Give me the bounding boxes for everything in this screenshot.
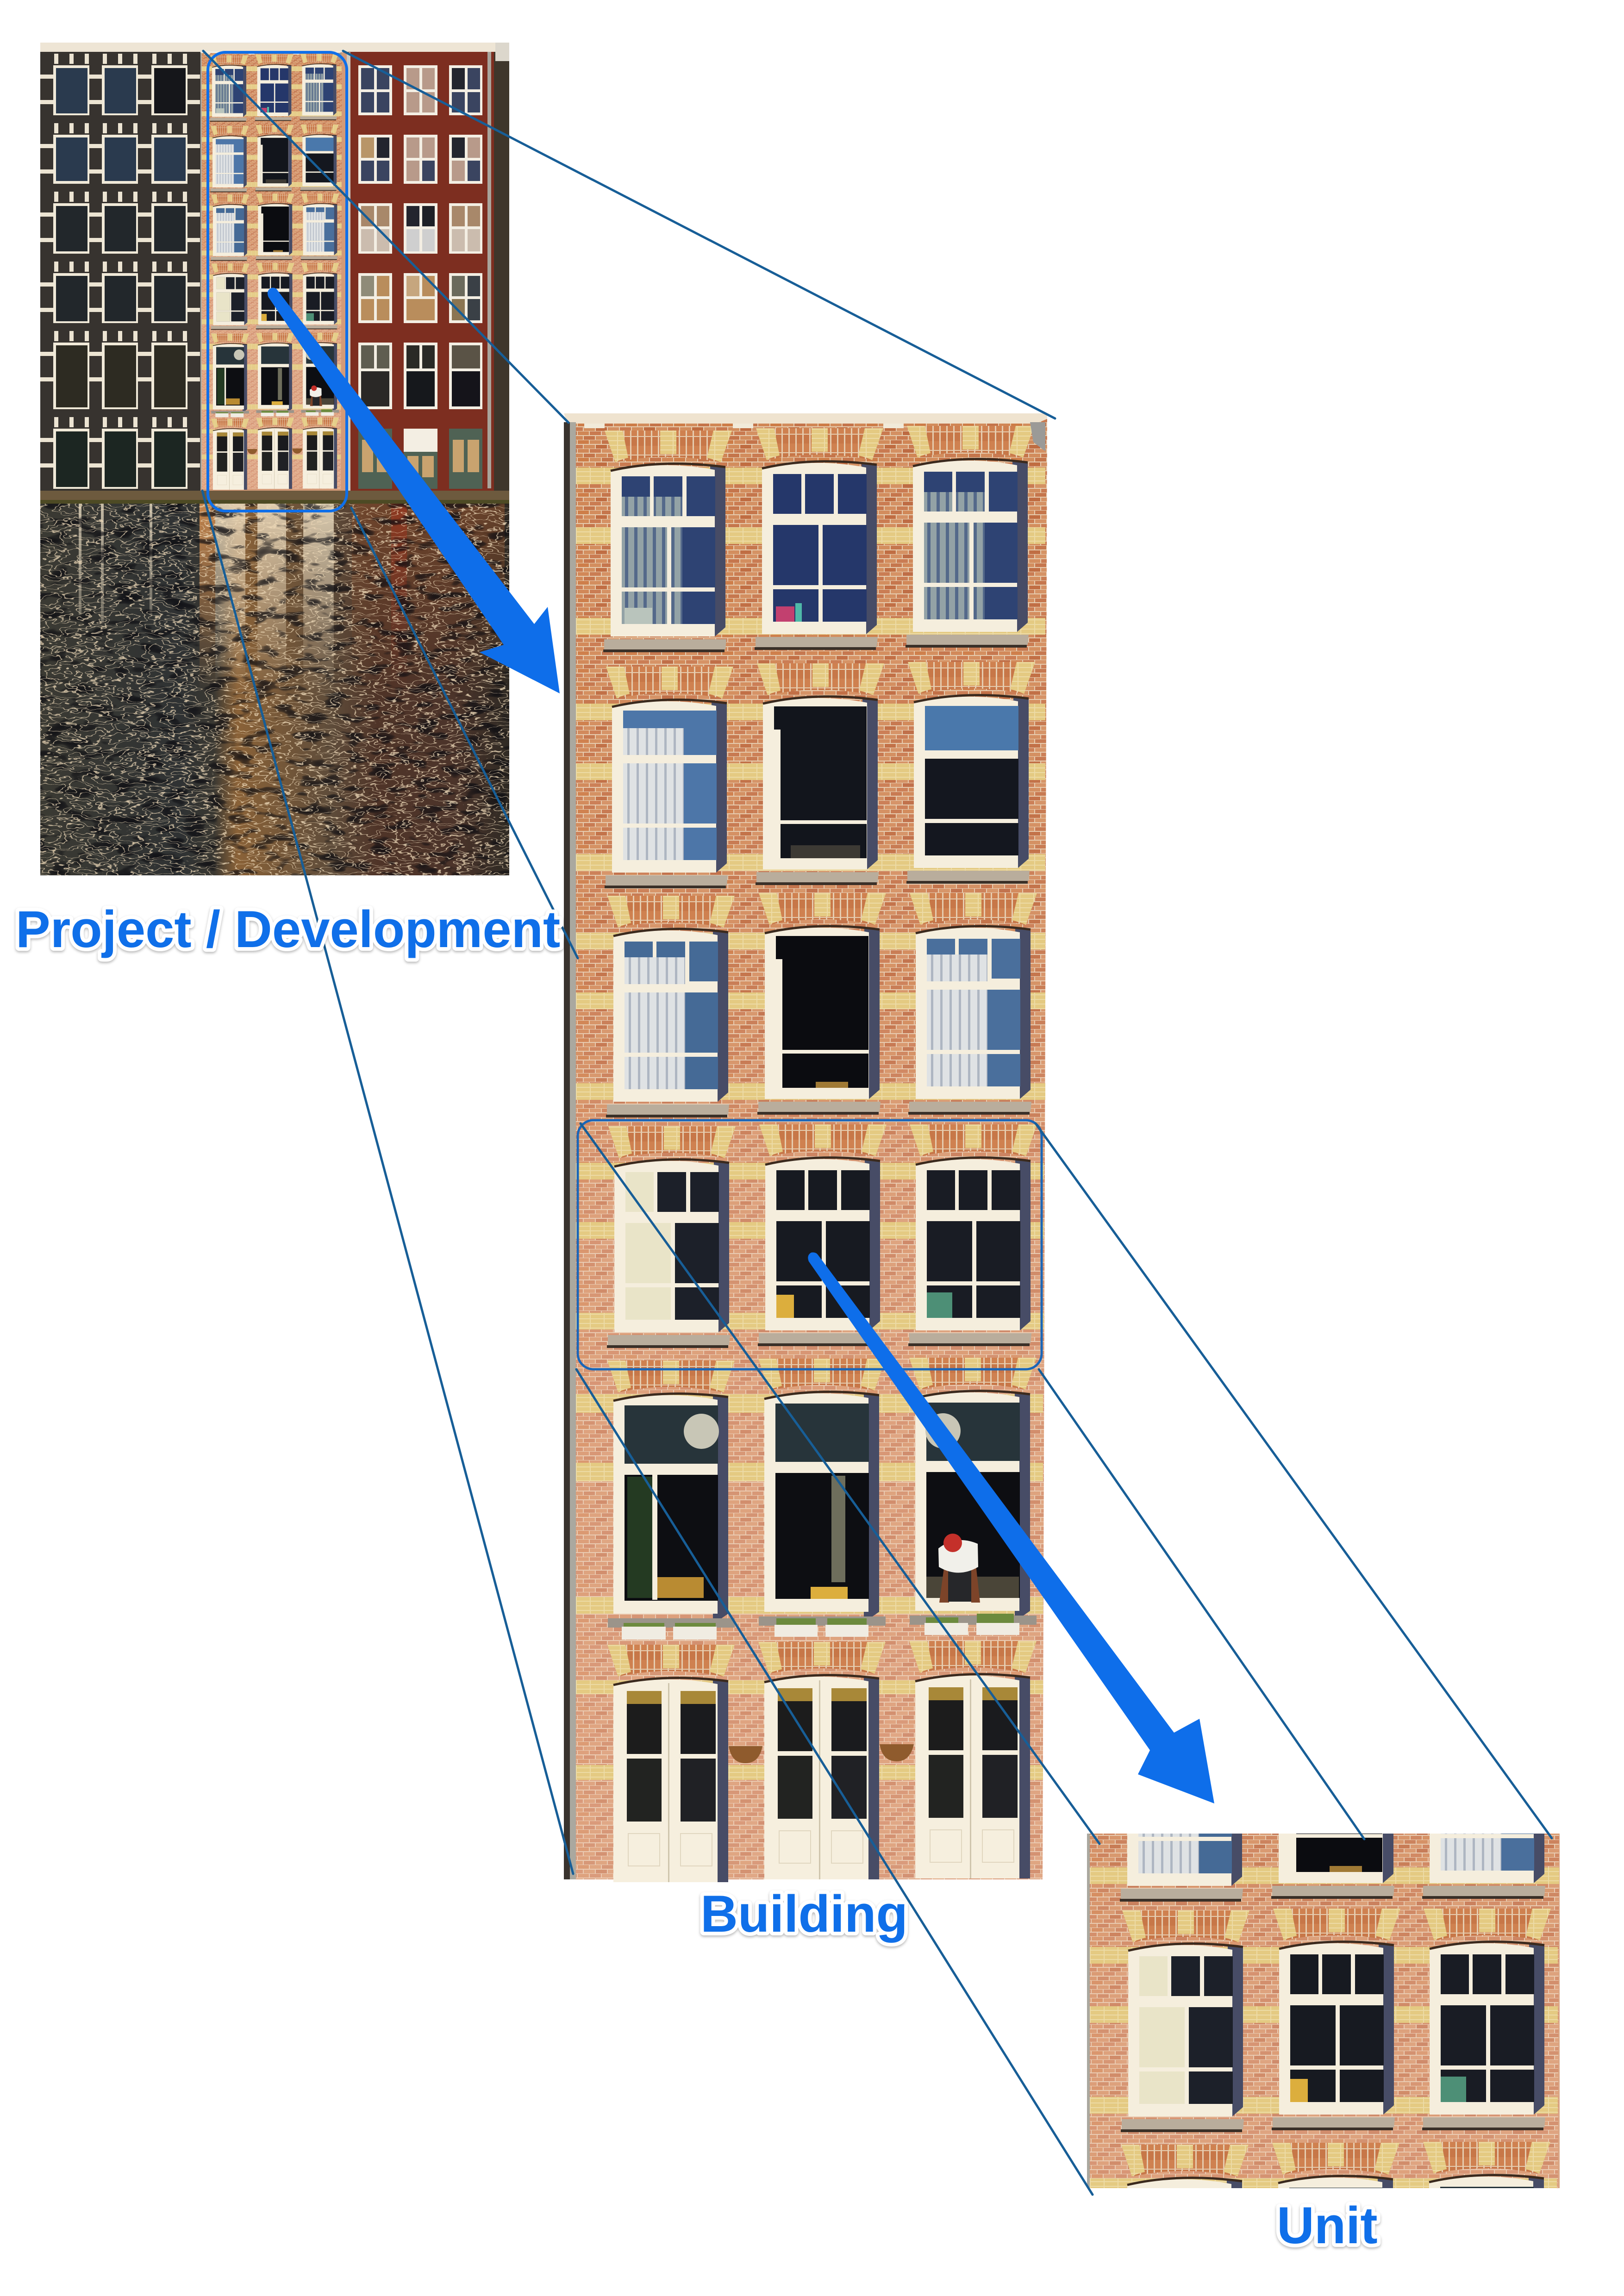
label: unit: Unit [1277,2196,1378,2254]
black brick building [40,46,200,491]
orange brick building [198,46,348,491]
arrow: project to building [268,288,560,693]
leader lines: project to building [202,51,1055,1874]
label: building: Building [700,1885,908,1943]
photo: building facade [564,413,1047,1882]
rounded highlight: building within project [208,52,347,511]
quay wall [40,491,509,504]
rounded highlight: unit within building [578,1120,1042,1369]
arrow: building to unit [808,1253,1214,1803]
leader lines: building to unit [576,1123,1552,2195]
photo: unit crop [1087,1834,1560,2188]
water reflection [40,504,509,875]
cornice [40,43,509,61]
photo: project / development waterfront [40,43,509,875]
red brick building [347,43,509,491]
label: project / development: Project / Development [16,900,560,958]
